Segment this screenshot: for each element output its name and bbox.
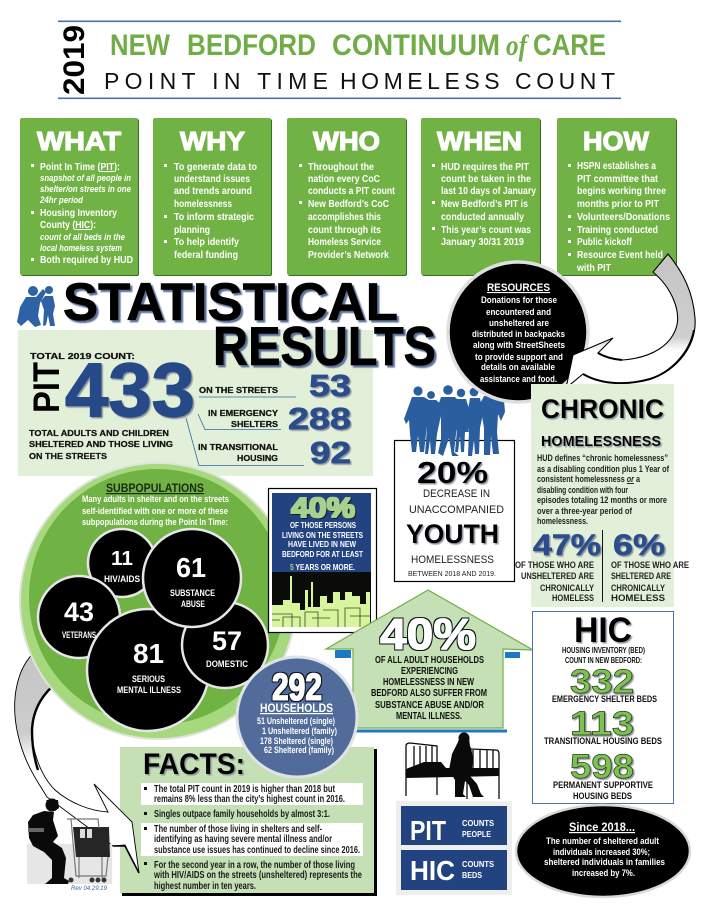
circle: serious mental illness: SERIOUS	[132, 674, 165, 685]
HIC counts beds: BEDS	[462, 870, 482, 880]
heading: statistical results: RESULTS	[213, 315, 436, 377]
main title: BEDFORD	[187, 29, 316, 62]
main title	[110, 29, 606, 62]
panel: HOW: HSPN establishes a	[577, 160, 656, 172]
panel: WHAT	[20, 118, 139, 276]
HIC heading: HIC	[574, 611, 632, 650]
year: 2019	[58, 25, 91, 95]
subpopulation intro: self-identified with one or more of these	[82, 506, 228, 517]
panel: WHO: WHO	[313, 126, 380, 156]
definition: HUD defines “chronic homelessness”	[537, 453, 668, 464]
cart	[67, 819, 110, 882]
circle: HIV/AIDS: 11	[111, 548, 133, 570]
panel: WHEN: WHEN	[437, 126, 522, 156]
PIT counts people: COUNTS	[462, 818, 494, 828]
breakdown: SHELTERS	[231, 419, 278, 429]
panel: subpopulations	[19, 462, 297, 740]
circle: domestic	[182, 602, 268, 688]
panel: WHAT: Point In Time (PIT):	[40, 161, 120, 173]
facts list: substance use issues has continued to decline since 2016.	[154, 845, 360, 856]
panel: WHY: planning	[174, 224, 210, 236]
revision note: Rev 04.29.19	[71, 885, 107, 892]
main title: CARE	[533, 29, 606, 62]
statistic text: LIVING ON THE STREETS	[282, 530, 363, 540]
bed counts: 113	[570, 705, 634, 743]
47 percent: CHRONICALLY	[540, 583, 595, 594]
panel: WHEN: count be taken in the	[441, 173, 531, 185]
panel: 292 households	[237, 657, 357, 777]
panel: WHY: To inform strategic	[174, 211, 254, 223]
circle: domestic: DOMESTIC	[206, 659, 248, 670]
panel: HIC	[532, 611, 674, 804]
resources text: to provide support and	[475, 352, 563, 363]
resources text	[472, 295, 565, 385]
arrow: HOW to resources	[566, 254, 695, 388]
circle: veterans	[38, 576, 120, 658]
panel: youth homelessness	[394, 440, 514, 582]
icon: person with shopping cart	[27, 798, 112, 884]
facts list: The total PIT count in 2019 is higher than 2018 but	[154, 784, 336, 795]
definition	[537, 453, 670, 527]
resources text: assistance and food.	[480, 374, 557, 385]
panel: PIT total count: SHELTERED AND THOSE LIVING	[29, 439, 173, 449]
panel: HOW: Volunteers/Donations	[577, 211, 670, 223]
panel: WHO: nation every CoC	[308, 173, 380, 185]
panel: HOW	[557, 118, 677, 276]
panel: since 2018: The number of sheltered adult	[546, 836, 660, 847]
panel: WHAT: WHAT	[37, 126, 121, 156]
statistic text: 5 YEARS OR MORE.	[290, 562, 355, 572]
PIT counts people	[401, 806, 507, 846]
breakdown: HOUSING	[237, 453, 278, 463]
circle: substance abuse: SUBSTANCE	[170, 588, 215, 599]
6 percent: HOMELESS	[611, 593, 665, 604]
panel: HOW: months prior to PIT	[577, 198, 659, 210]
household breakdown: 62 Sheltered (family)	[264, 745, 334, 755]
household breakdown: 1 Unsheltered (family)	[262, 726, 337, 736]
facts list: highest number in ten years.	[154, 881, 256, 892]
panel: HOW: begins working three	[577, 185, 666, 197]
40 percent: 40%	[291, 492, 355, 523]
breakdown: IN EMERGENCY	[208, 408, 278, 418]
facts list: For the second year in a row, the number of those living	[154, 860, 355, 871]
6 percent	[611, 529, 689, 604]
panel: WHY: and trends around	[174, 185, 252, 197]
subtitle: HOMELESS COUNT	[340, 68, 615, 94]
house text	[371, 655, 487, 722]
house text: HOMELESSNESS IN NEW	[383, 677, 474, 688]
house text: MENTAL ILLNESS.	[396, 711, 462, 722]
panel: chronic homelessness	[515, 384, 689, 607]
panel: WHO: New Bedford’s CoC	[308, 198, 389, 210]
panel: youth homelessness: YOUTH	[406, 519, 499, 549]
chronic heading	[541, 394, 664, 450]
main title: CONTINUUM	[332, 29, 500, 62]
facts list: identifying as having severe mental illness and/or	[154, 834, 332, 845]
circle: veterans: VETERANS	[62, 630, 96, 641]
panel: since 2018	[516, 805, 690, 897]
circle: substance abuse: 61	[176, 552, 206, 583]
panel: since 2018: increased by 7%.	[572, 868, 635, 879]
panel: youth homelessness: 20%	[417, 455, 488, 490]
panel: WHEN: New Bedford’s PIT is	[441, 198, 528, 210]
HIC counts beds: COUNTS	[462, 859, 494, 869]
panel: WHO: count through its	[308, 224, 381, 236]
subpopulation intro	[82, 494, 229, 528]
panel: youth homelessness: DECREASE IN	[423, 488, 490, 500]
breakdown: ON THE STREETS	[199, 385, 278, 395]
panel: HOW: HOW	[583, 126, 649, 156]
breakdown: 53	[309, 368, 351, 403]
title block	[58, 20, 621, 99]
panel: WHY: To generate data to	[174, 161, 257, 173]
skyline	[272, 572, 371, 627]
chronic heading: CHRONIC	[541, 394, 664, 424]
panel: HOW: Training conducted	[577, 224, 658, 236]
facts list: Singles outpace family households by almost 3:1.	[154, 809, 330, 820]
facts list	[144, 784, 362, 892]
panel: WHEN: HUD requires the PIT	[441, 161, 529, 173]
panel: WHAT: Housing Inventory	[40, 207, 117, 219]
PIT vertical label: PIT	[26, 362, 67, 413]
6 percent: CHRONICALLY	[611, 583, 666, 594]
panel: WHAT: Both required by HUD	[40, 254, 133, 266]
PIT counts people: PEOPLE	[462, 829, 491, 839]
statistic text: BEDFORD FOR AT LEAST	[282, 549, 364, 559]
HIC counts beds	[401, 850, 507, 890]
big 40 percent: 40%	[380, 610, 476, 659]
panel: youth homelessness: UNACCOMPANIED	[409, 504, 504, 516]
number 292: 292	[272, 667, 322, 709]
panel: HOW: with PIT	[576, 262, 611, 274]
house text: BEDFORD ALSO SUFFER FROM	[371, 688, 487, 699]
6 percent: 6%	[613, 529, 665, 562]
PIT counts people: PIT	[410, 815, 446, 846]
panel: HOW: Public kickoff	[577, 236, 632, 248]
panel: facts	[120, 747, 377, 896]
47 percent: 47%	[533, 529, 601, 562]
panel: youth homelessness: HOMELESSNESS	[411, 554, 494, 566]
household breakdown	[257, 716, 337, 755]
main title: of	[506, 29, 530, 62]
definition: homelessness.	[537, 516, 588, 527]
icon: adult and child	[17, 286, 55, 327]
47 percent: UNSHELTERED ARE	[521, 571, 594, 582]
panel: house 40 percent	[326, 590, 533, 732]
circle: substance abuse: ABUSE	[181, 599, 205, 610]
icon: group of people	[404, 384, 505, 456]
circle: substance abuse	[143, 529, 241, 627]
resources text: details on available	[481, 362, 555, 373]
house text: EXPERIENCING	[401, 666, 458, 677]
circle: serious mental illness: 81	[133, 638, 164, 669]
definition: over a three-year period of	[537, 506, 633, 517]
panel: WHO	[287, 118, 407, 276]
panel: WHO: conducts a PIT count	[308, 185, 395, 197]
resources text: encountered and	[486, 307, 551, 318]
panel: PIT and HIC definitions	[396, 801, 512, 895]
panel: WHEN: January 30/31 2019	[441, 236, 524, 248]
circle: HIV/AIDS	[88, 529, 156, 597]
icon: person on bed	[406, 732, 499, 799]
panel: since 2018: Since 2018...	[569, 820, 635, 834]
panel: WHY	[153, 118, 272, 276]
panel: WHY: WHY	[180, 126, 245, 156]
breakdown: 92	[310, 435, 351, 470]
definition: as a disabling condition plus 1 Year of	[537, 464, 670, 475]
panel: WHO: Throughout the	[308, 161, 374, 173]
breakdown	[186, 368, 351, 470]
resources text: unsheltered are	[489, 318, 549, 329]
bed labels: HOUSING BEDS	[573, 791, 632, 802]
panel: since 2018: sheltered individuals in families	[544, 857, 665, 868]
panel: WHAT: local homeless system	[40, 243, 122, 254]
bed labels: PERMANENT SUPPORTIVE	[553, 780, 653, 791]
facts list: with HIV/AIDS on the streets (unsheltered) represents the	[153, 870, 362, 881]
panel: WHAT: 24hr period	[39, 195, 83, 206]
description: TOTAL ADULTS AND CHILDREN	[29, 428, 169, 438]
panel: PIT total count: ON THE STREETS	[29, 451, 107, 461]
bed counts: 598	[570, 748, 634, 786]
subpopulation intro: Many adults in shelter and on the streets	[82, 494, 229, 505]
HIC sub-heading: COUNT IN NEW BEDFORD:	[565, 656, 642, 665]
household breakdown: 51 Unsheltered (single)	[257, 716, 335, 726]
subtitle: POINT IN TIME	[104, 68, 328, 94]
panel: HOW: PIT committee that	[577, 173, 658, 185]
breakdown: IN TRANSITIONAL	[198, 442, 278, 452]
households heading: HOUSEHOLDS	[260, 701, 333, 715]
circle: serious mental illness	[87, 609, 209, 731]
panel: 40 percent long-term residents	[268, 488, 376, 632]
panel: HOW: Resource Event held	[577, 249, 663, 261]
panel: WHO: Homeless Service	[308, 236, 381, 248]
panel: WHO: accomplishes this	[308, 211, 381, 223]
chronic heading: HOMELESSNESS	[541, 433, 661, 450]
panel: WHO: Provider’s Network	[308, 249, 389, 261]
total count label: TOTAL 2019 COUNT:	[30, 351, 135, 361]
house text: SUBSTANCE ABUSE AND/OR	[375, 700, 485, 711]
panel: WHY: federal funding	[174, 249, 238, 261]
resources text: distributed in backpacks	[472, 329, 565, 340]
statistic text	[282, 520, 364, 572]
definition: disabling condition with four	[537, 485, 628, 496]
definition: consistent homelessness or a	[537, 474, 641, 485]
panel: WHAT: shelter/on streets in one	[40, 184, 132, 195]
6 percent: OF THOSE WHO ARE	[611, 560, 689, 571]
panel: youth homelessness: BETWEEN 2018 AND 2019.	[408, 569, 496, 578]
panel: WHAT: snapshot of all people in	[40, 173, 131, 184]
47 percent: HOMELESS	[552, 593, 594, 604]
resources text: along with StreetSheets	[473, 340, 565, 351]
definition: episodes totaling 12 months or more	[537, 495, 667, 506]
bed counts: 332	[570, 663, 634, 701]
bed labels	[544, 694, 662, 802]
circle: domestic: 57	[212, 626, 242, 656]
circle: HIV/AIDS: HIV/AIDS	[104, 574, 140, 585]
HIC sub-heading	[562, 646, 645, 665]
main title: NEW	[110, 29, 171, 62]
statistic text: OF THOSE PERSONS	[290, 520, 356, 530]
panel: WHEN: This year’s count was	[441, 224, 531, 236]
resources heading: RESOURCES	[487, 282, 550, 294]
panel: resources	[448, 262, 588, 402]
circle: serious mental illness: MENTAL ILLNESS	[117, 685, 181, 696]
resources text: Donations for those	[481, 295, 557, 306]
HIC counts beds: HIC	[410, 855, 455, 886]
statistic text: HAVE LIVED IN NEW	[288, 539, 357, 549]
subpopulation intro: subpopulations during the Point In Time:	[82, 517, 228, 528]
household breakdown: 178 Sheltered (single)	[260, 736, 333, 746]
heading: statistical results	[63, 273, 436, 377]
heading: statistical results: STATISTICAL	[63, 273, 398, 332]
bed labels: EMERGENCY SHELTER BEDS	[552, 694, 657, 705]
panel: PIT total count	[18, 330, 373, 476]
panel: WHY: homelessness	[174, 198, 232, 210]
facts list: remains 8% less than the city’s highest count in 2016.	[154, 794, 345, 805]
circle: veterans: 43	[64, 597, 94, 627]
subpopulation heading: SUBPOPULATIONS	[106, 481, 204, 495]
panel: WHEN	[421, 118, 541, 276]
facts heading: FACTS:	[143, 748, 245, 781]
panel: WHEN: conducted annually	[441, 211, 524, 223]
facts list: The number of those living in shelters and self-	[154, 824, 322, 835]
6 percent: SHELTERED ARE	[611, 571, 671, 582]
HIC sub-heading: HOUSING INVENTORY (BED)	[562, 646, 645, 655]
subtitle	[104, 68, 615, 94]
panel: WHEN: last 10 days of January	[441, 185, 536, 197]
bed labels: TRANSITIONAL HOUSING BEDS	[544, 736, 662, 747]
panel: WHY: understand issues	[174, 173, 250, 185]
47 percent: OF THOSE WHO ARE	[515, 560, 594, 571]
house text: OF ALL ADULT HOUSEHOLDS	[375, 655, 484, 666]
breakdown: 288	[288, 401, 351, 436]
arrow: subpopulations to person	[15, 649, 139, 873]
panel: since 2018: individuals increased 30%;	[553, 847, 650, 858]
bed counts	[570, 663, 634, 786]
panel: WHAT: County (HIC):	[40, 219, 96, 231]
number 433: 433	[65, 348, 195, 433]
panel: WHY: To help identify	[174, 236, 239, 248]
47 percent	[515, 529, 601, 604]
panel: WHAT: count of all beds in the	[40, 232, 126, 243]
person	[28, 798, 69, 884]
